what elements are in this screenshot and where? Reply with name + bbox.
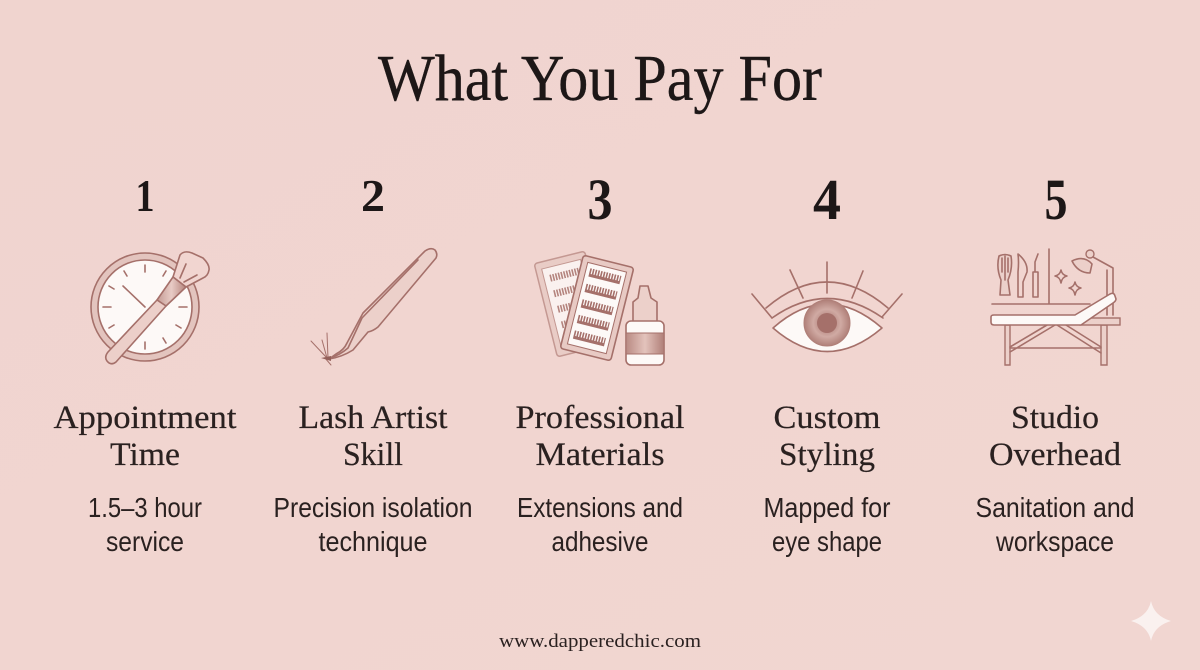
column 5: studio overhead [976,167,1134,557]
column 2: lash artist skill: Skill [343,437,403,473]
label: lash artist skill: Lash Artist [298,400,448,436]
column 1: appointment time [54,170,236,557]
number 3: 3 [588,167,612,232]
column 5: studio overhead: Overhead [989,437,1122,473]
number 4: 4 [813,167,841,232]
icon: treatment table and tools [991,249,1120,365]
description: eye shape: Mapped for [764,492,890,523]
number 5: 5 [1044,167,1068,232]
column 2: lash artist skill [274,170,472,557]
title: What You Pay For [378,42,822,115]
number 1: 1 [136,170,154,221]
column 5: studio overhead: workspace [995,526,1114,557]
icon: lash trays and adhesive [534,251,664,365]
column 1: appointment time: service [106,526,184,557]
description: technique: Precision isolation [274,492,472,523]
label: appointment time: Appointment [54,400,236,436]
column 3: professional materials [516,167,684,557]
column 2: lash artist skill: technique [318,526,428,557]
column 4: custom styling: eye shape [772,526,882,557]
icon: mapped eye [752,262,902,352]
column 3: professional materials: adhesive [552,526,648,557]
description: extensions: Extensions and [517,492,683,523]
description: service length: 1.5–3 hour [88,492,202,523]
number 2: 2 [361,170,385,221]
column 3: professional materials: Materials [536,437,664,473]
label: custom styling: Custom [774,400,881,436]
icon: clock and brush [91,252,209,364]
label: studio overhead: Studio [1011,400,1099,436]
label: professional materials: Professional [516,400,684,436]
column 1: appointment time: Time [110,437,180,473]
column 4: custom styling: Styling [779,437,875,473]
footer url: www.dapperedchic.com [499,631,701,652]
column 4: custom styling [752,167,902,557]
description: sanitation: Sanitation and [976,492,1134,523]
icon: sparkle watermark [1131,601,1171,641]
icon: tweezers [311,249,437,365]
